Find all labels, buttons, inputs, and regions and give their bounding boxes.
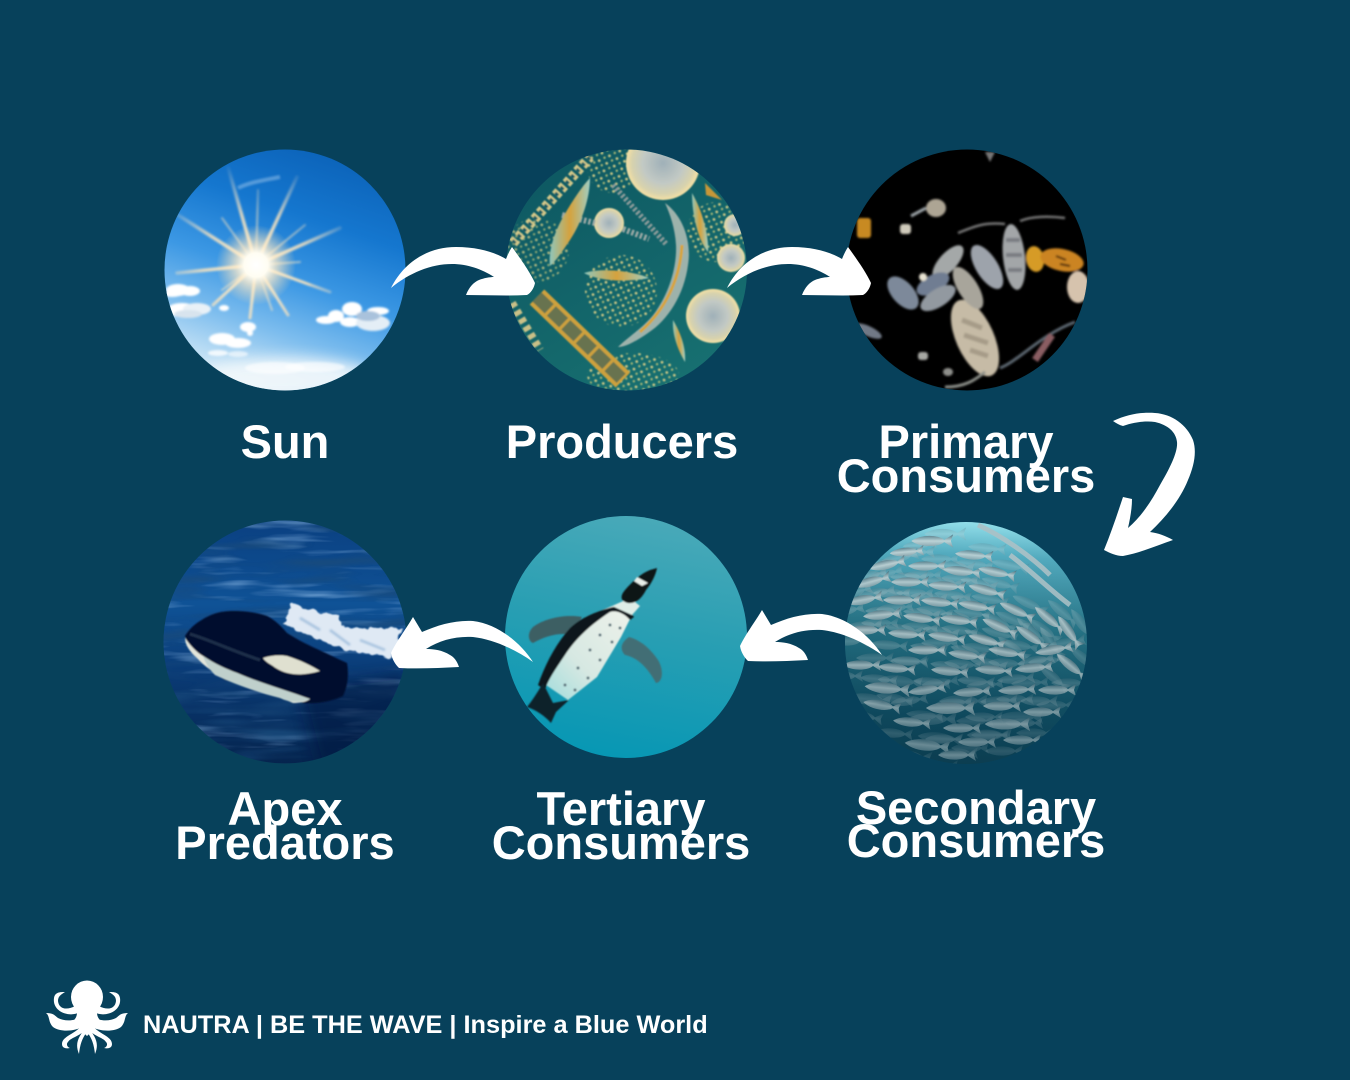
label: Apex Predators: Apex — [228, 782, 342, 835]
icon: zooplankton primary consumers — [840, 145, 1095, 395]
icon: fish school secondary consumers — [845, 522, 1087, 764]
label: Primary Consumers: Consumers — [837, 449, 1095, 502]
icon: sun in blue sky — [160, 145, 410, 398]
label: Primary Consumers: Primary — [878, 415, 1054, 468]
arrow: secondary to tertiary consumers — [740, 610, 882, 661]
icon: octopus logo — [46, 980, 128, 1054]
arrow: producers to primary consumers — [727, 247, 871, 295]
label: Apex Predators: Predators — [175, 816, 395, 869]
arrow: sun to producers — [391, 247, 535, 295]
icon: orca apex predator — [160, 516, 410, 768]
label: Sun: Sun — [241, 415, 329, 468]
label: Producers: Producers — [506, 415, 738, 468]
arrow: primary to secondary consumers — [1104, 413, 1195, 556]
label: Secondary Consumers: Consumers — [847, 814, 1105, 867]
icon: phytoplankton producers — [506, 150, 747, 390]
footer tagline: NAUTRA | BE THE WAVE | Inspire a Blue World — [143, 1011, 708, 1039]
label: Tertiary Consumers: Tertiary — [537, 782, 705, 835]
label: Secondary Consumers: Secondary — [856, 781, 1096, 834]
icon: penguin tertiary consumers — [500, 512, 752, 762]
infographic canvas — [46, 150, 1195, 1054]
arrow: tertiary to apex predators — [391, 617, 533, 668]
label: Tertiary Consumers: Consumers — [492, 816, 750, 869]
